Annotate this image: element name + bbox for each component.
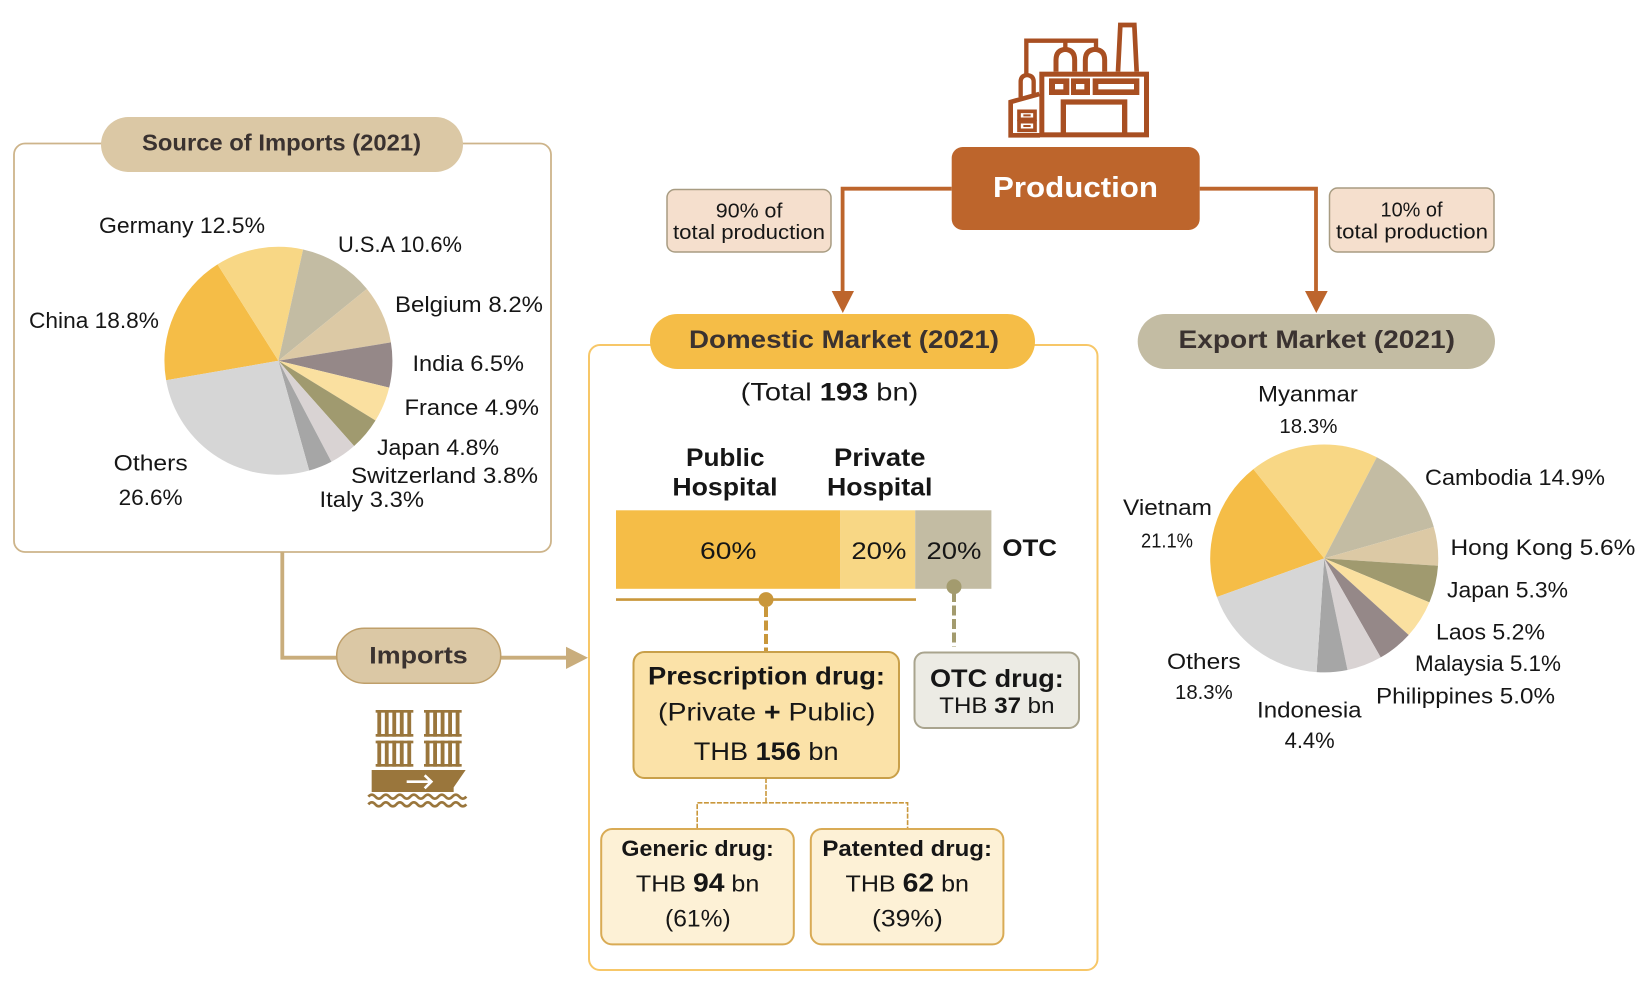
label: public hospital: Hospital <box>672 474 778 502</box>
pie labels: export market: Myanmar <box>1258 381 1358 406</box>
callout: 10% of total production: total production <box>1336 222 1488 244</box>
pie chart: source of imports <box>164 247 392 475</box>
label: public hospital <box>672 444 778 502</box>
box: patented drug <box>811 829 1003 944</box>
stacked bar: market share: 60% <box>700 538 756 565</box>
box: generic drug: Generic drug: <box>621 836 774 861</box>
pie labels: export market: Others <box>1167 649 1241 674</box>
pie labels: export market: 18.3% <box>1175 682 1233 704</box>
arrow: imports flow <box>282 552 588 669</box>
heading pill: domestic market: Domestic Market (2021) <box>689 326 999 354</box>
arrow: production to export market <box>1200 189 1328 313</box>
heading pill: source of imports: Source of Imports (2021) <box>142 129 421 155</box>
arrow: production to domestic market <box>832 189 952 313</box>
label: private hospital <box>827 444 932 502</box>
pie labels: source of imports: China 18.8% <box>29 308 159 333</box>
label pill: imports <box>337 628 501 683</box>
label: private hospital: Hospital <box>827 474 932 502</box>
box: prescription drug: Prescription drug: <box>648 662 885 690</box>
callout: 90% of total production: 90% of <box>716 200 783 222</box>
pie labels: export market: Indonesia <box>1257 697 1362 722</box>
pie chart: export market <box>1210 444 1438 672</box>
heading box: production: Production <box>993 172 1158 204</box>
connector: prescription bracket <box>616 592 916 652</box>
box: OTC drug: THB 37 bn <box>939 693 1054 718</box>
box: OTC drug: OTC drug: <box>930 665 1064 693</box>
pie labels: source of imports <box>29 213 543 512</box>
box: patented drug: (39%) <box>872 906 943 932</box>
pie labels: export market: 21.1% <box>1141 530 1193 552</box>
heading pill: source of imports <box>101 117 463 172</box>
box: generic drug: (61%) <box>665 906 731 932</box>
icon: factory <box>1008 25 1146 136</box>
pie labels: export market: Malaysia 5.1% <box>1415 651 1561 676</box>
stacked bar: market share: 20% <box>926 538 982 565</box>
pie labels: export market: Hong Kong 5.6% <box>1450 535 1635 560</box>
pie labels: source of imports: Italy 3.3% <box>320 487 424 512</box>
pie labels: source of imports: Switzerland 3.8% <box>351 463 538 488</box>
label: public hospital: Public <box>686 444 765 472</box>
heading pill: export market: Export Market (2021) <box>1178 326 1455 354</box>
panel: domestic market <box>589 314 1098 970</box>
box: generic drug: THB 94 bn <box>636 867 759 897</box>
pie labels: source of imports: India 6.5% <box>412 351 524 376</box>
callout: 10% of total production <box>1330 188 1494 252</box>
box: patented drug: Patented drug: <box>822 836 992 861</box>
heading box: production <box>952 147 1200 230</box>
connector: OTC <box>946 579 962 646</box>
pie labels: export market: Vietnam <box>1123 495 1212 520</box>
pie labels: source of imports: Japan 4.8% <box>377 435 499 460</box>
box: prescription drug <box>634 652 899 778</box>
pie labels: export market: Cambodia 14.9% <box>1425 465 1605 490</box>
label pill: imports: Imports <box>369 642 468 670</box>
box: OTC drug <box>914 652 1079 728</box>
icon: container ship <box>368 710 466 806</box>
pie labels: source of imports: France 4.9% <box>404 395 539 420</box>
pie labels: source of imports: Belgium 8.2% <box>395 292 543 317</box>
stacked bar: market share: 20% <box>851 538 906 565</box>
pie labels: export market: 18.3% <box>1279 416 1338 438</box>
pie labels: source of imports: U.S.A 10.6% <box>338 232 462 257</box>
pie labels: export market: Japan 5.3% <box>1447 578 1568 603</box>
box: prescription drug: THB 156 bn <box>694 738 839 766</box>
box: patented drug: THB 62 bn <box>846 867 969 897</box>
box: prescription drug: (Private + Public) <box>658 698 876 726</box>
connector: prescription to generic and patented <box>697 778 908 829</box>
pie labels: source of imports: Germany 12.5% <box>99 213 265 238</box>
pie labels: source of imports: Others <box>114 450 188 476</box>
panel: source of imports <box>14 117 551 552</box>
heading pill: export market <box>1138 314 1495 369</box>
pie labels: export market <box>1123 381 1635 753</box>
heading pill: domestic market <box>650 314 1035 369</box>
callout: 10% of total production: 10% of <box>1380 200 1443 222</box>
pie labels: source of imports: 26.6% <box>119 485 183 510</box>
text: market total: (Total 193 bn) <box>741 379 918 407</box>
callout: 90% of total production <box>667 190 831 252</box>
label: private hospital: Private <box>834 444 926 472</box>
pie labels: export market: Laos 5.2% <box>1436 619 1545 644</box>
label: OTC: OTC <box>1002 535 1057 562</box>
box: generic drug <box>601 829 794 944</box>
callout: 90% of total production: total production <box>673 222 825 244</box>
pie labels: export market: 4.4% <box>1285 728 1335 753</box>
pie labels: export market: Philippines 5.0% <box>1376 684 1555 709</box>
stacked bar: market share <box>616 510 991 589</box>
